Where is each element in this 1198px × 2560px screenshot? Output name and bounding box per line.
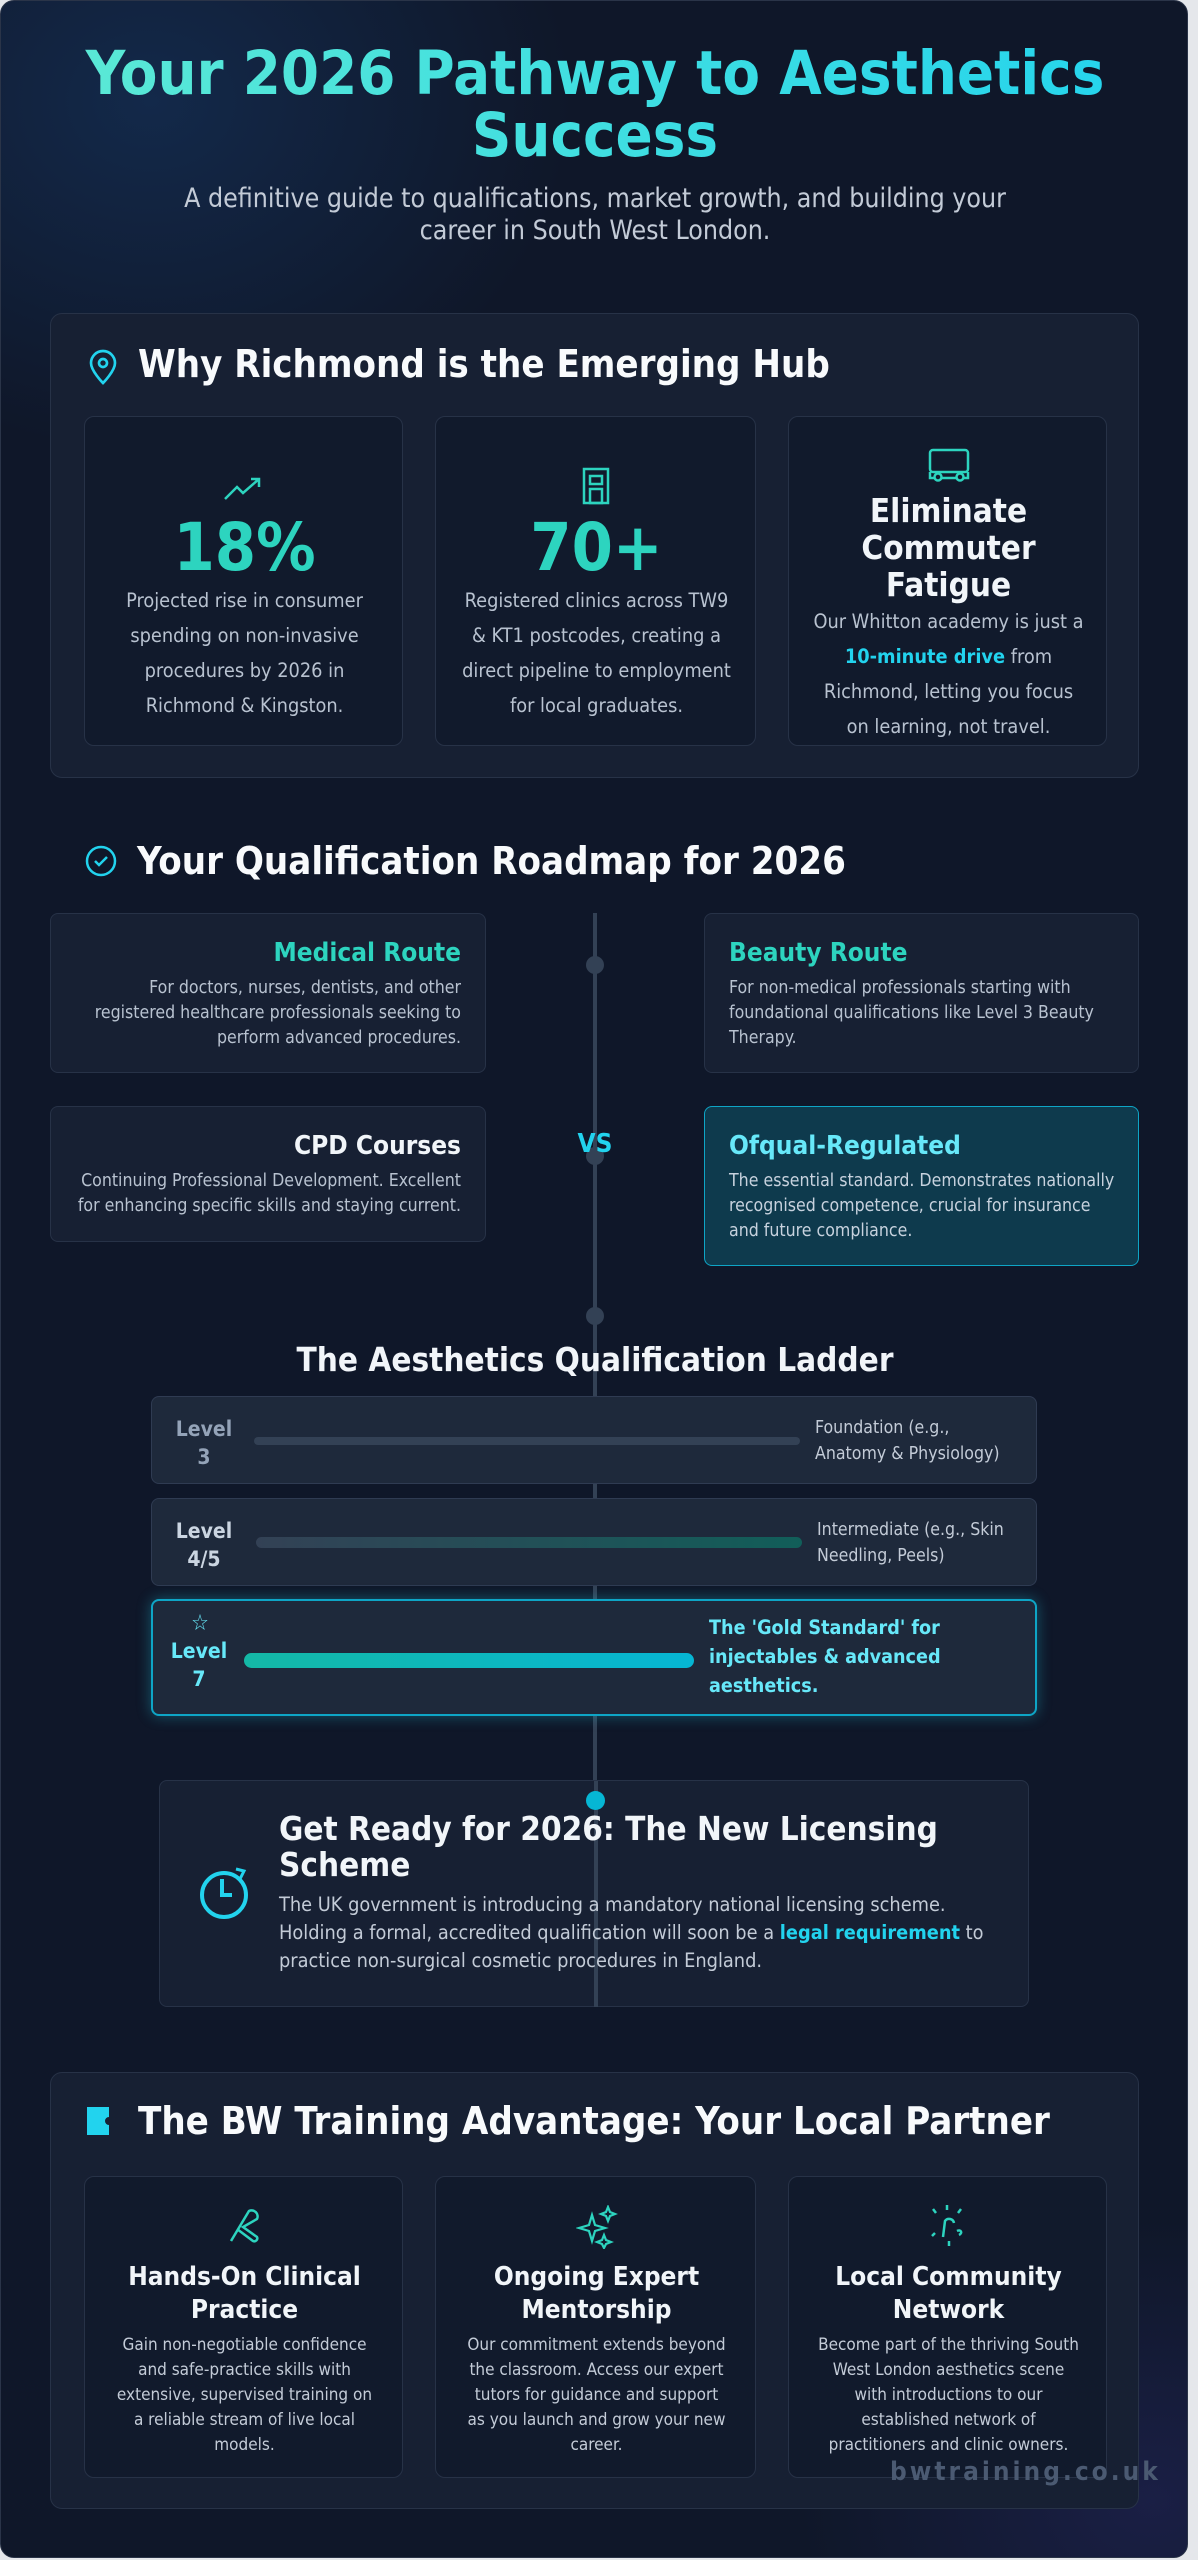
card: community — [788, 2176, 1107, 2478]
card: hands-on: models. — [214, 2435, 275, 2455]
ladder: level 7: 7 — [192, 1667, 206, 1691]
text — [813, 610, 1084, 738]
title — [279, 1809, 938, 1884]
card: cpd: CPD Courses — [294, 1131, 461, 1161]
card: mentorship: Our commitment extends beyond — [467, 2335, 726, 2355]
text: Projected rise in consumer — [126, 589, 363, 612]
card: 18% — [84, 416, 403, 746]
card: mentorship — [435, 2176, 756, 2478]
card: 70+ — [435, 416, 756, 746]
card: commute — [788, 416, 1107, 746]
ladder: level 4/5: 4/5 — [187, 1547, 221, 1571]
icon: clock — [200, 1868, 248, 1919]
subtitle: career in South West London. — [420, 215, 770, 246]
card: beauty route — [704, 913, 1139, 1073]
title: Your 2026 Pathway to Aesthetics — [86, 38, 1104, 109]
stat: 18% — [173, 509, 316, 586]
ladder: level 3: Level — [176, 1417, 232, 1441]
ladder: level 3: Anatomy & Physiology) — [815, 1444, 1000, 1464]
ladder: level 7 — [151, 1599, 1037, 1716]
card: beauty route: For non-medical professionals starting with — [729, 978, 1071, 998]
card: community: established network of — [861, 2410, 1036, 2430]
card: ofqual: Ofqual-Regulated — [729, 1131, 961, 1161]
card: community: West London aesthetics scene — [833, 2360, 1064, 2380]
card: hands-on: Hands-On Clinical — [128, 2262, 361, 2292]
text: direct pipeline to employment — [462, 659, 731, 682]
icon: building — [582, 468, 610, 504]
text: Richmond, letting you focus — [824, 680, 1073, 703]
icon: trend — [224, 478, 260, 500]
text — [126, 589, 363, 717]
icon: location pin — [90, 350, 116, 385]
title: Commuter — [861, 528, 1036, 567]
title: Scheme — [279, 1845, 410, 1884]
ladder: level 3: Foundation (e.g., — [815, 1418, 949, 1438]
ladder heading: The Aesthetics Qualification Ladder — [297, 1340, 893, 1379]
icon: bus — [928, 448, 970, 482]
text — [462, 589, 731, 717]
licensing callout — [159, 1780, 1029, 2007]
title: Get Ready for 2026: The New Licensing — [279, 1809, 938, 1848]
card: hands-on: and safe-practice skills with — [138, 2360, 351, 2380]
text: The UK government is introducing a mandatory national licensing scheme. — [279, 1893, 946, 1916]
roadmap heading: Your Qualification Roadmap for 2026 — [137, 839, 846, 883]
icon: check circle — [86, 846, 116, 876]
card: medical route: perform advanced procedures. — [217, 1028, 461, 1048]
card: cpd: for enhancing specific skills and staying current. — [78, 1196, 461, 1216]
card: medical route — [50, 913, 486, 1073]
card: mentorship: Mentorship — [522, 2295, 671, 2325]
title: Fatigue — [886, 565, 1011, 604]
title: Eliminate — [870, 491, 1027, 530]
stat: 70+ — [530, 509, 663, 586]
card: cpd — [50, 1106, 486, 1242]
ladder: level 3 — [151, 1396, 1037, 1484]
text: Richmond & Kingston. — [146, 694, 343, 717]
card: cpd: Continuing Professional Development. Excellent — [81, 1171, 461, 1191]
icon: star: ☆ — [191, 1611, 209, 1636]
card: beauty route: Therapy. — [729, 1028, 797, 1048]
ladder: level 7: Level — [171, 1639, 227, 1663]
card: mentorship: career. — [570, 2435, 623, 2455]
ladder: level 4/5: Level — [176, 1519, 232, 1543]
card: mentorship: tutors for guidance and support — [475, 2385, 718, 2405]
icon: ticket — [87, 2107, 109, 2135]
card: hands-on: Gain non-negotiable confidence — [122, 2335, 367, 2355]
card: hands-on: Practice — [191, 2295, 298, 2325]
text: Registered clinics across TW9 — [465, 589, 728, 612]
ladder: level 4/5 — [151, 1498, 1037, 1586]
ladder: level 3: 3 — [197, 1445, 211, 1469]
card: medical route: For doctors, nurses, dentists, and other — [149, 978, 461, 998]
card: community: Network — [893, 2295, 1004, 2325]
card: ofqual — [704, 1106, 1139, 1266]
card: hands-on: a reliable stream of live local — [134, 2410, 355, 2430]
text: Our Whitton academy is just a — [813, 610, 1084, 633]
title: Success — [472, 100, 718, 171]
subtitle — [184, 183, 1006, 246]
card: beauty route: Beauty Route — [729, 938, 908, 968]
card: ofqual: The essential standard. Demonstrates nationally — [729, 1171, 1114, 1191]
text: on learning, not travel. — [847, 715, 1050, 738]
card: community: Become part of the thriving South — [818, 2335, 1079, 2355]
ladder: level 7: aesthetics. — [709, 1674, 818, 1697]
text: for local graduates. — [510, 694, 683, 717]
panel: why richmond — [50, 313, 1139, 778]
subtitle: A definitive guide to qualifications, market growth, and building your — [184, 183, 1006, 214]
card: beauty route: foundational qualifications like Level 3 Beauty — [729, 1003, 1094, 1023]
card: ofqual: recognised competence, crucial for insurance — [729, 1196, 1090, 1216]
footer url: bwtraining.co.uk — [890, 2457, 1161, 2487]
card: medical route: Medical Route — [274, 938, 461, 968]
text: Holding a formal, accredited qualification will soon be a legal requirement to — [279, 1921, 984, 1944]
card: medical route: registered healthcare professionals seeking to — [95, 1003, 461, 1023]
card: community: practitioners and clinic owners. — [829, 2435, 1068, 2455]
card: mentorship: Ongoing Expert — [494, 2262, 699, 2292]
ladder: level 4/5: Needling, Peels) — [817, 1546, 945, 1566]
text: & KT1 postcodes, creating a — [472, 624, 721, 647]
timeline line — [593, 913, 597, 2007]
title — [861, 491, 1036, 604]
card: mentorship: the classroom. Access our expert — [469, 2360, 724, 2380]
card: mentorship: as you launch and grow your new — [468, 2410, 725, 2430]
text: 10-minute drive from — [845, 645, 1052, 668]
text: spending on non-invasive — [130, 624, 359, 647]
panel: bw advantage — [50, 2072, 1139, 2509]
ladder: level 4/5: Intermediate (e.g., Skin — [817, 1520, 1004, 1540]
ladder: level 7: injectables & advanced — [709, 1645, 941, 1668]
card: hands-on — [84, 2176, 403, 2478]
vs label: VS — [578, 1129, 612, 1159]
card: ofqual: and future compliance. — [729, 1221, 912, 1241]
ladder: level 7: The 'Gold Standard' for — [709, 1616, 940, 1639]
heading: Why Richmond is the Emerging Hub — [138, 342, 830, 386]
text: practice non-surgical cosmetic procedures in England. — [279, 1949, 762, 1972]
heading: The BW Training Advantage: Your Local Partner — [138, 2099, 1050, 2143]
text — [278, 1893, 984, 1972]
card: community: with introductions to our — [854, 2385, 1042, 2405]
text: procedures by 2026 in — [145, 659, 344, 682]
title — [1, 43, 1189, 167]
card: community: Local Community — [835, 2262, 1062, 2292]
card: hands-on: extensive, supervised training on — [117, 2385, 372, 2405]
